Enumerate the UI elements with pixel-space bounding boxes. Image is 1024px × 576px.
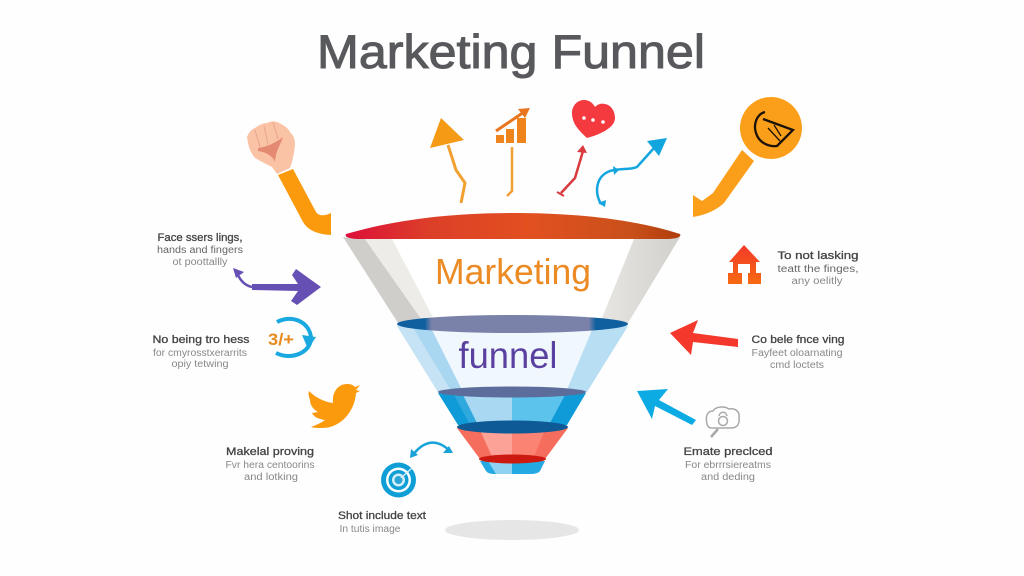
icon: purple arrows — [233, 268, 321, 305]
funnel: blue section — [397, 326, 628, 392]
label: middle left: for cmyrosstxerarrits — [153, 348, 247, 359]
icon: cycle arrow with number — [268, 319, 316, 356]
icon: orange circle with arrow — [693, 97, 802, 217]
orange arm arrow — [278, 169, 331, 235]
funnel: fourth ring — [457, 420, 568, 434]
label: top right — [778, 250, 858, 287]
icon: red arrow — [670, 320, 738, 355]
label: top left — [157, 232, 243, 268]
label: middle left: opiy tetwing — [172, 359, 228, 370]
label: top right: any oelitly — [792, 276, 842, 287]
label: top right: To not lasking — [778, 250, 858, 262]
label: lower left: Makelal proving — [226, 446, 314, 458]
label: lower left: and lotking — [244, 472, 298, 483]
fist — [247, 121, 295, 174]
floor shadow — [445, 520, 579, 540]
label: top right: teatt the finges, — [778, 264, 858, 275]
label: middle right: Fayfeet oloarnating — [752, 348, 842, 359]
title: Marketing Funnel — [317, 25, 705, 78]
icon: orange triangle arrow — [430, 118, 465, 203]
icon: blue arrow — [637, 389, 696, 425]
label: middle left: No being tro hess — [152, 334, 250, 346]
funnel: bottom ring — [479, 454, 546, 464]
label: lower right — [684, 446, 772, 483]
icon: bar chart with arrow — [496, 108, 530, 196]
icon: cycle arrow with number: 3/+ — [268, 330, 294, 349]
icon: house — [728, 245, 761, 284]
label: top left: hands and fingers — [157, 245, 243, 256]
label: bottom: Shot include text — [338, 510, 426, 522]
funnel: top rim — [346, 213, 680, 239]
funnel — [343, 213, 680, 474]
label: bottom — [338, 510, 426, 535]
funnel word: funnel: funnel — [458, 335, 558, 376]
icon: fist with orange arrow — [247, 121, 331, 235]
icon: curved double arrow — [410, 443, 453, 458]
funnel: lower blue section — [438, 393, 586, 425]
label: lower right: and deding — [701, 472, 755, 483]
label: middle right: cmd loctets — [770, 360, 824, 371]
label: lower right: Emate preclced — [684, 446, 772, 458]
funnel: second ring — [397, 315, 628, 333]
funnel: red section — [457, 428, 568, 459]
funnel: spout — [480, 461, 545, 474]
icon: red heart with arrow — [557, 100, 615, 196]
label: middle left — [152, 334, 250, 370]
funnel: top section — [343, 237, 680, 323]
icon: blue curving arrow — [597, 138, 667, 207]
label: bottom: In tutis image — [340, 524, 401, 535]
label: lower left — [226, 446, 314, 483]
label: top left: Face ssers lings, — [158, 232, 242, 244]
funnel: third ring — [438, 386, 586, 398]
icon: target — [381, 462, 416, 498]
label: middle right — [752, 334, 844, 371]
label: lower right: For ebrrrsiereatms — [685, 460, 771, 471]
label: top left: ot poottallly — [172, 257, 228, 268]
label: lower left: Fvr hera centoorins — [226, 460, 314, 471]
funnel word: Marketing: Marketing — [435, 251, 591, 292]
label: middle right: Co bele fnce ving — [752, 334, 844, 346]
icon: speech bubble — [706, 407, 739, 437]
icon: orange bird — [309, 384, 360, 428]
